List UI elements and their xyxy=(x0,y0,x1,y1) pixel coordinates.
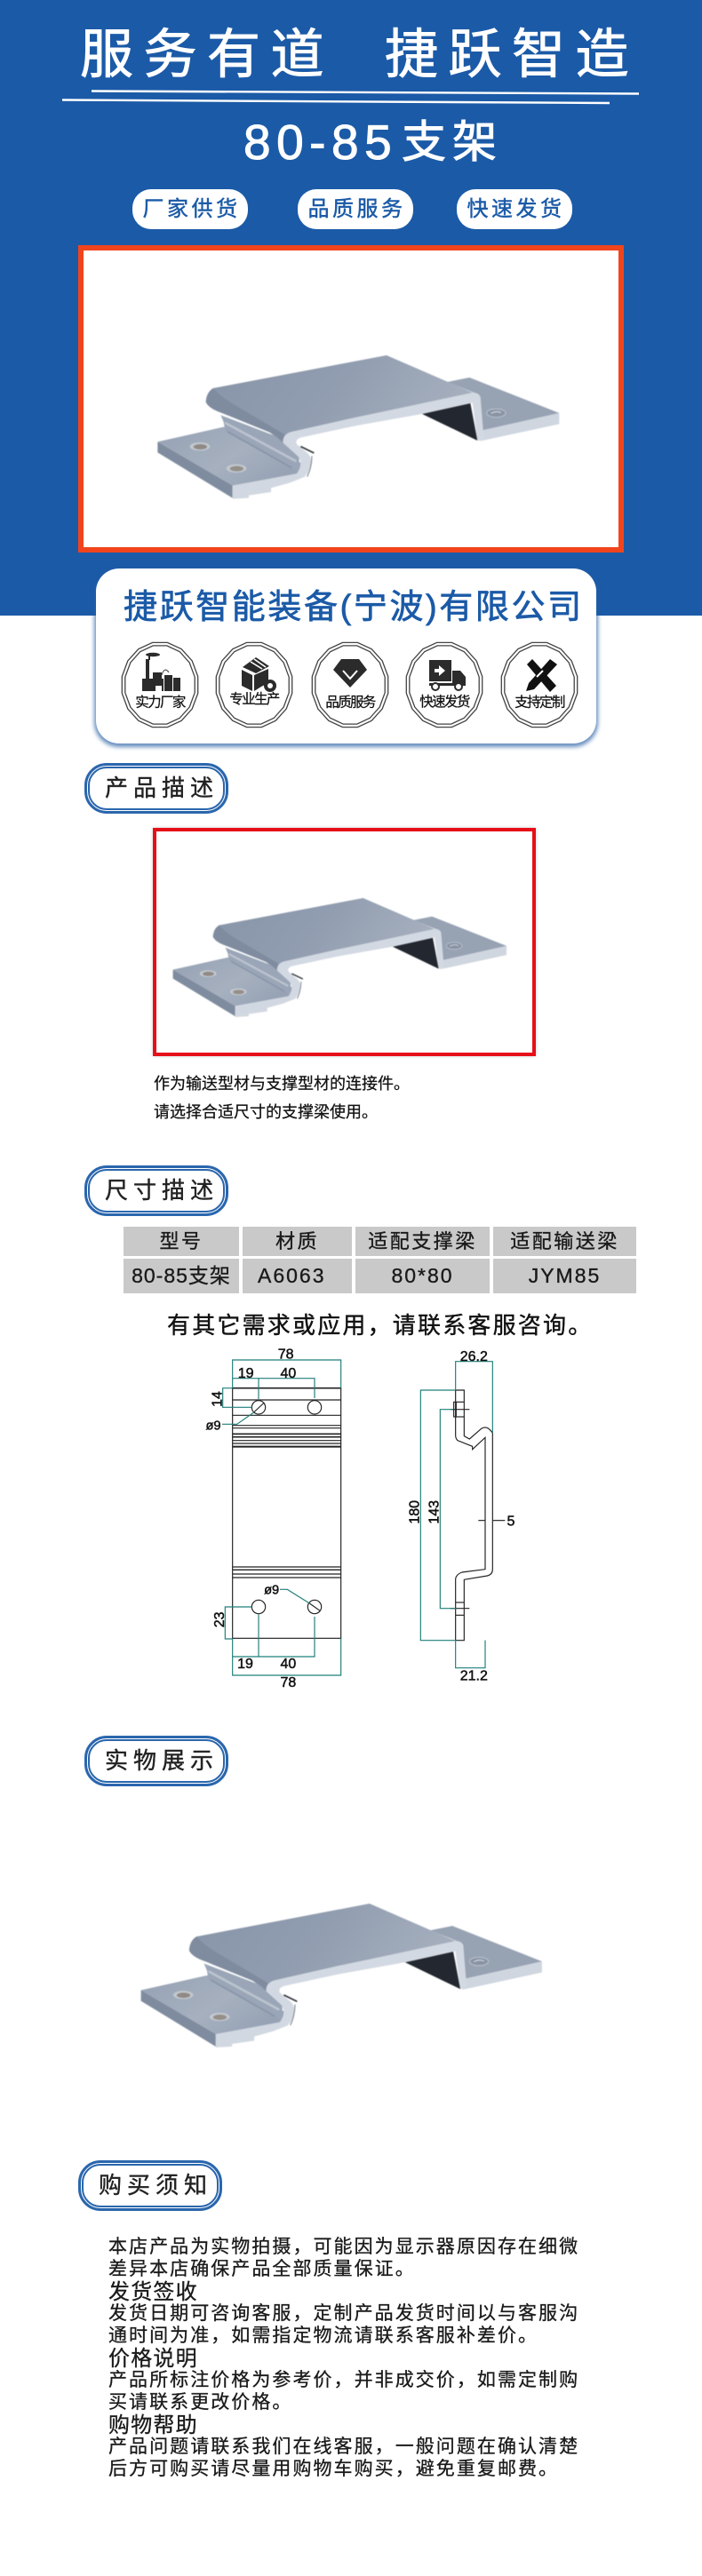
header: support beam: 适配支撑梁 xyxy=(368,1230,477,1252)
header: support beam xyxy=(355,1227,490,1256)
tag: fast delivery: 快速发货 xyxy=(467,197,565,221)
icon: delivery truck badge: 快速发货 xyxy=(419,694,470,710)
description bracket photo xyxy=(172,897,507,1018)
front view: 19 xyxy=(238,1366,254,1381)
icon: factory badge: 实力厂家 xyxy=(135,695,186,711)
front view: 78 xyxy=(278,1348,294,1363)
section heading: product display xyxy=(84,1736,228,1786)
product name: 支架 xyxy=(402,117,503,167)
value: model: 80-85支架 xyxy=(132,1264,231,1287)
help line 1: 产品问题请联系我们在线客服，一般问题在确认清楚 xyxy=(108,2437,579,2457)
side view xyxy=(407,1349,515,1683)
icon: pencil and ruler badge: 支持定制 xyxy=(515,695,565,711)
section heading: product description xyxy=(84,763,228,814)
value: material xyxy=(243,1259,352,1293)
heading: delivery: 发货签收 xyxy=(108,2280,198,2304)
pricing line 2: 买请联系更改价格。 xyxy=(108,2392,292,2413)
side view: 26.2 xyxy=(460,1349,488,1364)
description line 1: 作为输送型材与支撑型材的连接件。 xyxy=(154,1075,410,1093)
blue header background xyxy=(0,0,702,616)
side view: 143 xyxy=(427,1500,443,1524)
title: left phrase: 服务有道 xyxy=(80,25,334,84)
tag: fast delivery xyxy=(457,189,572,229)
side view: 5 xyxy=(507,1515,515,1530)
tag: quality service: 品质服务 xyxy=(307,197,405,221)
section heading: purchase notes xyxy=(78,2160,222,2211)
front view: 40 xyxy=(280,1366,296,1381)
hero bracket photo xyxy=(156,355,560,499)
title: right phrase: 捷跃智造 xyxy=(385,25,639,84)
heading: help: 购物帮助 xyxy=(108,2413,198,2437)
delivery line 2: 通时间为准，如需指定物流请联系客服补差价。 xyxy=(108,2326,538,2346)
front view: 40 xyxy=(280,1657,296,1672)
contact note: 有其它需求或应用，请联系客服咨询。 xyxy=(167,1312,593,1339)
value: conveyor beam xyxy=(493,1259,636,1293)
heading: pricing: 价格说明 xyxy=(108,2347,198,2371)
header: model xyxy=(124,1227,239,1256)
value: conveyor beam: JYM85 xyxy=(529,1264,601,1287)
spec table xyxy=(124,1227,636,1293)
tag: factory supply: 厂家供货 xyxy=(142,197,240,221)
description image frame xyxy=(153,828,536,1056)
icon: diamond badge: 品质服务 xyxy=(325,695,376,711)
front view: 14 xyxy=(210,1391,225,1407)
technical drawing xyxy=(205,1348,515,1690)
side view: 21.2 xyxy=(460,1668,488,1683)
front view: ø9 xyxy=(264,1584,279,1598)
header: material: 材质 xyxy=(275,1230,319,1252)
icon: pencil and ruler badge xyxy=(501,642,578,727)
icon: diamond badge xyxy=(312,642,388,727)
front view: 78 xyxy=(280,1675,296,1690)
product model digits: 80-85 xyxy=(243,115,397,170)
icon row xyxy=(121,641,578,728)
intro line 1: 本店产品为实物拍摄，可能因为显示器原因存在细微 xyxy=(108,2237,579,2257)
value: material: A6063 xyxy=(258,1264,326,1287)
purchase notes text xyxy=(108,2237,579,2479)
section heading: purchase notes: 购买须知 xyxy=(99,2172,212,2198)
intro line 2: 差异本店确保产品全部质量保证。 xyxy=(108,2259,416,2279)
front view xyxy=(205,1348,341,1690)
delivery line 1: 发货日期可咨询客服，定制产品发货时间以与客服沟 xyxy=(108,2303,579,2324)
help line 2: 后方可购买请尽量用购物车购买，避免重复邮费。 xyxy=(108,2459,559,2479)
company card xyxy=(96,568,596,743)
icon: factory badge xyxy=(122,642,198,727)
section heading: dimensions xyxy=(84,1165,228,1216)
tag: quality service xyxy=(298,189,413,229)
value: model xyxy=(124,1259,239,1293)
section heading: dimensions: 尺寸描述 xyxy=(105,1177,219,1204)
icon: delivery truck badge xyxy=(406,642,483,727)
header: conveyor beam xyxy=(493,1227,636,1256)
icon: box and gear badge xyxy=(216,642,292,727)
icon: box and gear badge: 专业生产 xyxy=(229,691,280,707)
hero image frame xyxy=(78,245,624,553)
value: support beam xyxy=(355,1259,490,1293)
company name: 捷跃智能装备(宁波)有限公司 xyxy=(124,589,584,626)
description line 2: 请选择合适尺寸的支撑梁使用。 xyxy=(154,1103,378,1121)
header: model: 型号 xyxy=(159,1230,203,1252)
front view: ø9 xyxy=(205,1419,221,1433)
side view: 180 xyxy=(407,1500,422,1524)
front view: 23 xyxy=(212,1611,227,1627)
header: conveyor beam: 适配输送梁 xyxy=(510,1230,619,1252)
value: support beam: 80*80 xyxy=(391,1264,454,1287)
section heading: product display: 实物展示 xyxy=(105,1747,219,1774)
title underlines xyxy=(62,90,639,105)
section heading: product description: 产品描述 xyxy=(105,775,219,801)
front view: 19 xyxy=(237,1657,253,1672)
pricing line 1: 产品所标注价格为参考价，并非成交价，如需定制购 xyxy=(108,2370,579,2390)
tag: factory supply xyxy=(132,189,248,229)
header: material xyxy=(243,1227,352,1256)
